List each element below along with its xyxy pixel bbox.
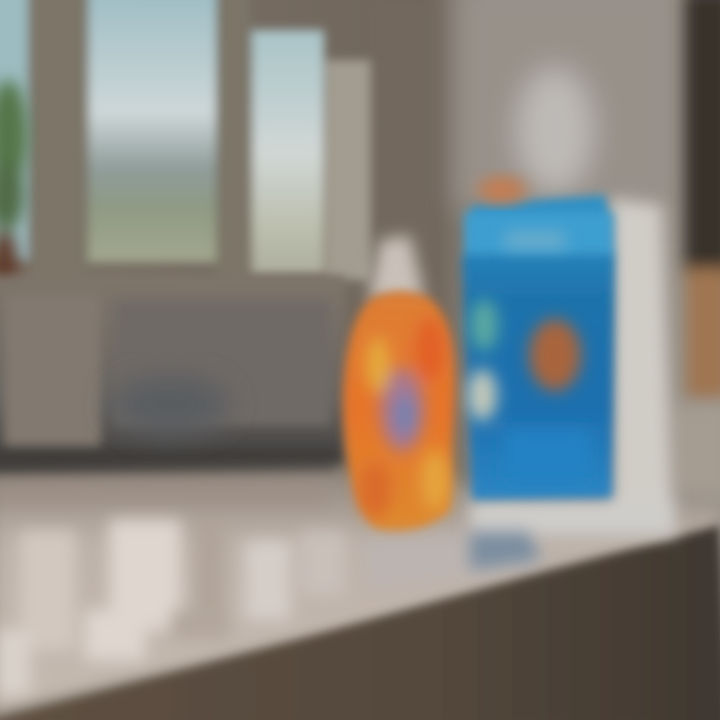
box cap [478,177,526,203]
counter front edge [0,525,720,720]
orange bottle [343,235,455,531]
bottle neck [368,235,425,300]
white box side [470,198,675,570]
window with panes [0,0,440,290]
dark shelf and wood at far right [672,0,720,495]
wall right side [455,0,680,210]
sink backsplash [0,275,345,476]
plant at window edge [0,80,28,300]
marble counter [0,470,720,715]
box label emblem [467,232,590,480]
bottle label [359,318,449,518]
blue box [462,177,615,500]
sink basin shadow [110,375,230,435]
bottle body [343,292,455,531]
